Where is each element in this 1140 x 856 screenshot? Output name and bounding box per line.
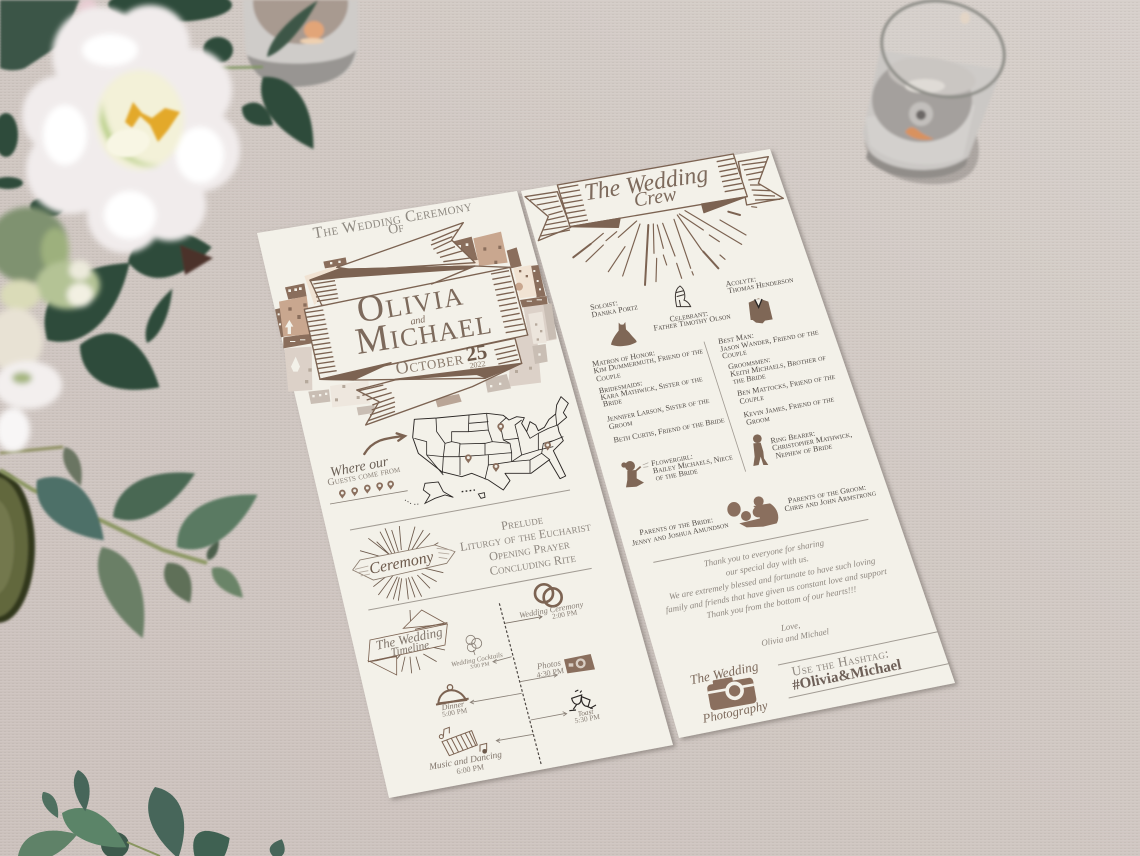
- timeline: music and dancing keyboard: 6:00 PM: [456, 762, 485, 776]
- timeline: wedding ceremony rings: [505, 584, 584, 623]
- order of service list: Liturgy of the Eucharist: [459, 519, 592, 554]
- timeline: photos camera: 4:30 PM: [536, 666, 565, 680]
- crew right column: Keith Michaels, Brother of: [729, 353, 827, 379]
- timeline: music and dancing keyboard: Music and Dancing: [428, 750, 503, 773]
- date: october 25 2022: 2022: [469, 359, 486, 370]
- crew: parents of the groom: Chris and John Armstrong: [784, 488, 877, 513]
- ceremony sunburst badge: Ceremony: [368, 549, 436, 578]
- order of service list: Opening Prayer: [488, 537, 571, 564]
- thank you message: Olivia and Michael: [760, 626, 830, 648]
- crew: celebrant: Father Timothy Olson: [653, 311, 732, 333]
- names: olivia and michael: and: [410, 314, 427, 328]
- photography logo: Photography: [700, 698, 769, 726]
- crew: parents of the groom: Parents of the Groom:: [787, 483, 867, 505]
- candle: glass votive top right: [863, 0, 1015, 184]
- icon: dress: [611, 322, 637, 346]
- green glass vase: [0, 471, 35, 623]
- thank you message: our special day with us.: [725, 553, 809, 578]
- eucalyptus leaves: around the flower: [0, 0, 330, 408]
- timeline: photos camera: Photos: [535, 657, 562, 672]
- thank you message: Thank you from the bottom of our hearts!!!: [706, 584, 857, 620]
- timeline: dinner cloche: 5:00 PM: [441, 705, 468, 719]
- map of the united states: [413, 397, 568, 490]
- names: olivia and michael: Olivia: [354, 272, 467, 332]
- hashtag section: [778, 632, 950, 698]
- crew left column: Jennifer Larson, Sister of the: [606, 396, 710, 424]
- crew right column: Couple: [721, 347, 748, 361]
- timeline vertical dashed line: [499, 603, 541, 765]
- arrow to map: [364, 433, 405, 454]
- crew right column: Couple: [739, 393, 765, 406]
- thank you message: family and friends that have given us constant love and support: [665, 566, 888, 615]
- thank you message: Love,: [779, 620, 801, 633]
- icon: celebrant: [675, 286, 691, 307]
- right program card: [521, 149, 955, 738]
- crew right column: the Bride: [732, 371, 766, 386]
- where our guests come from: Where our: [329, 454, 390, 481]
- the wedding timeline badge: The Wedding: [374, 624, 444, 653]
- crew right column: Jason Wander, Friend of the: [719, 327, 819, 354]
- crew left column: Groom: [608, 418, 634, 431]
- photography logo: The Wedding: [689, 658, 760, 687]
- timeline: wedding cocktails: Wedding Cocktails: [451, 651, 504, 669]
- eucalyptus leaves: bottom left: [13, 769, 288, 856]
- thank you message: [665, 537, 888, 648]
- left program card: [257, 191, 673, 798]
- crew: acolyte: Thomas Henderson: [727, 275, 795, 295]
- the wedding crew banner: [525, 154, 783, 241]
- timeline: toast glasses: Toast: [577, 707, 595, 718]
- card sheet: ceremony: [257, 191, 673, 798]
- crew right column: [717, 327, 836, 427]
- icon: family silhouette: [727, 496, 778, 527]
- timeline: wedding cocktails: [451, 635, 512, 671]
- order of service list: Concluding Rite: [489, 551, 577, 578]
- crew: soloist: Soloist:: [589, 298, 619, 312]
- timeline: toast glasses: [531, 690, 601, 725]
- crew left column: Couple: [595, 370, 622, 384]
- crew: ring bearer: Nephew of Bride: [775, 441, 833, 460]
- timeline: dinner cloche: Dinner: [440, 699, 466, 712]
- crew: flower girl: Flowergirl:: [650, 452, 693, 468]
- the wedding timeline badge: [368, 610, 447, 675]
- hashtag section: Use the Hashtag:: [790, 645, 890, 679]
- skyline buildings around the banner: [275, 232, 557, 415]
- crew right column: Best Man:: [717, 331, 754, 346]
- heading: the wedding ceremony of: The Wedding Ceremony: [312, 198, 473, 242]
- candle: glass votive top centre: [243, 0, 358, 87]
- names: olivia and michael: Michael: [353, 301, 495, 363]
- the wedding timeline badge: Timeline: [390, 639, 430, 659]
- timeline: toast glasses: 5:30 PM: [574, 712, 601, 725]
- timeline: dinner cloche: [436, 685, 522, 719]
- divider between columns: [704, 342, 746, 472]
- where our guests come from: Guests come from: [327, 464, 402, 489]
- ceremony sunburst badge: [353, 526, 455, 601]
- top section: names banner and map: [275, 198, 568, 504]
- order of service list: [459, 512, 592, 578]
- icon: ring bearer: [753, 434, 768, 466]
- crew left column: Kim Dummermuth, Friend of the: [593, 346, 704, 375]
- timeline: wedding ceremony rings: Wedding Ceremony: [519, 600, 584, 620]
- card sheet: the wedding crew: [521, 149, 955, 738]
- flower: lower white buds and blossoms: [0, 207, 100, 452]
- timeline: photos camera: [520, 654, 595, 682]
- crew: parents of the bride: Jenny and Joshua Amundson: [631, 520, 730, 548]
- crew: ring bearer: Ring Bearer:: [770, 429, 816, 445]
- crew left column: Beth Curtis, Friend of the Bride: [613, 415, 725, 445]
- crew top section: [525, 154, 853, 487]
- crew right column: Ben Mattocks, Friend of the: [736, 372, 836, 398]
- thank you message: We are extremely blessed and fortunate to have such loving: [668, 555, 877, 601]
- crew: flower girl: of the Bride: [655, 466, 699, 483]
- banner title: Crew: [632, 183, 678, 212]
- crew left column: Kara Mathwick, Sister of the: [600, 374, 704, 402]
- crew bottom section: [631, 483, 950, 726]
- timeline: wedding ceremony rings: 2:00 PM: [551, 607, 578, 621]
- crew: parents of the bride: Parents of the Bride:: [639, 515, 714, 537]
- divider above ceremony: [350, 490, 570, 530]
- heading: the wedding ceremony of: Of: [387, 220, 405, 238]
- date: october 25 2022: 25: [464, 339, 489, 366]
- crew: ring bearer: Christopher Mathwick,: [771, 430, 853, 453]
- crew left column: Matron of Honor:: [591, 348, 656, 369]
- banner sunburst rays: [573, 207, 757, 285]
- map location pins: [465, 423, 551, 472]
- timeline: wedding cocktails: 3:00 PM: [470, 661, 490, 671]
- timeline: music and dancing keyboard: [428, 727, 533, 776]
- crew: flower girl: Bailey Michaels, Niece: [652, 452, 734, 475]
- banner title: The Wedding: [582, 161, 710, 206]
- ribbon banner: [304, 223, 528, 425]
- date: october 25 2022: [394, 339, 489, 378]
- flower: white lisianthus bloom: [22, 0, 240, 253]
- order of service list: Prelude: [500, 512, 545, 533]
- flower: yellow stamens and bud: [104, 102, 180, 161]
- hashtag section: #Olivia&Michael: [791, 657, 903, 694]
- eucalyptus stems and leaves: left branch: [0, 444, 267, 645]
- crew: soloist: Danika Portz: [591, 302, 639, 319]
- crew right column: Groomsmen:: [727, 355, 771, 371]
- names: olivia and michael: [353, 272, 495, 363]
- icon: flower girl: [621, 461, 648, 487]
- icon: jacket: [749, 298, 773, 323]
- bottom section: order of service and timeline: [353, 512, 601, 776]
- ribbon hatching: [305, 229, 526, 421]
- row of five location pins: [339, 481, 394, 499]
- photography logo: [689, 658, 769, 726]
- crew left column: [591, 346, 725, 445]
- crew left column: Bridesmaids:: [598, 378, 643, 395]
- crew right column: Kevin James, Friend of the: [743, 394, 835, 419]
- crew left column: Bride: [602, 396, 623, 409]
- date: october 25 2022: October: [394, 348, 465, 378]
- thank you message: Thank you to everyone for sharing: [703, 537, 825, 569]
- crew: acolyte: Acolyte:: [725, 274, 757, 289]
- alaska and hawaii insets: [405, 482, 485, 504]
- crew: celebrant: Celebrant:: [669, 309, 709, 324]
- crew right column: Groom: [745, 414, 771, 427]
